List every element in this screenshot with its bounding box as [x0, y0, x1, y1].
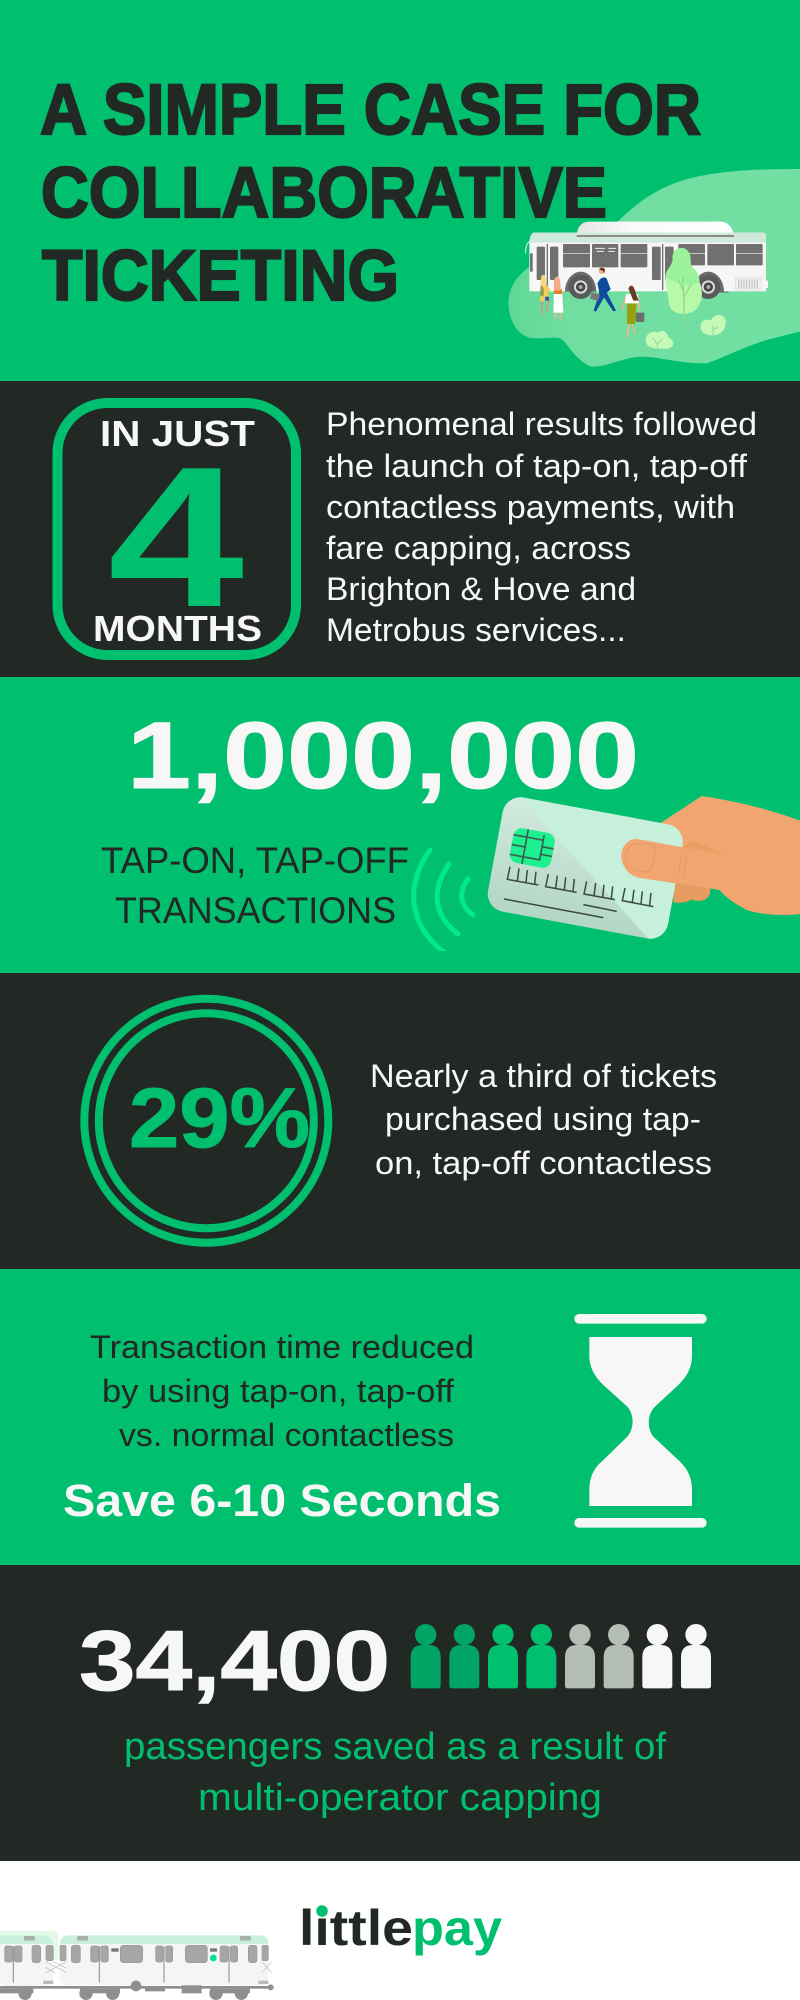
badge text: in just: IN JUST	[100, 413, 255, 454]
description text	[370, 1058, 717, 1181]
train undercarriage	[0, 1981, 274, 2000]
description text	[124, 1726, 666, 1819]
passenger in white with orange top	[553, 276, 563, 320]
title	[40, 71, 701, 316]
illustration: train	[0, 1931, 274, 2000]
bus body	[529, 233, 768, 291]
rounded badge outline	[58, 403, 296, 655]
intro paragraph	[326, 406, 757, 648]
intro paragraph: Brighton & Hove and	[326, 571, 636, 607]
logo: littlepay: little	[299, 1900, 413, 1956]
label: tap-on, tap-off transactions: TAP-ON, TAP-OFF	[101, 840, 409, 881]
card chip	[508, 827, 556, 869]
big number: 34,400	[79, 1614, 390, 1709]
title: A SIMPLE CASE FOR	[40, 71, 701, 150]
label: tap-on, tap-off transactions	[101, 840, 409, 931]
icon row: people	[411, 1624, 711, 1688]
icon: hourglass	[574, 1314, 707, 1528]
description text: vs. normal contactless	[119, 1417, 454, 1453]
credit card	[488, 797, 683, 939]
bus grille	[736, 277, 762, 290]
panel: in just 4 months	[0, 381, 800, 677]
tree	[665, 248, 702, 332]
intro paragraph: Phenomenal results followed	[326, 406, 757, 442]
thumb	[621, 839, 733, 890]
passenger in yellow	[540, 275, 551, 315]
description text: multi-operator capping	[198, 1777, 602, 1819]
bus roof	[577, 222, 734, 235]
description text: on, tap-off contactless	[375, 1145, 712, 1181]
passenger in blue suit	[590, 268, 616, 312]
logo: littlepay: pay	[412, 1900, 502, 1956]
intro paragraph: Metrobus services...	[326, 612, 626, 648]
title: TICKETING	[42, 237, 399, 316]
label: tap-on, tap-off transactions: TRANSACTIONS	[115, 890, 396, 931]
title: COLLABORATIVE	[41, 154, 607, 233]
icon: contactless waves	[414, 850, 473, 953]
train roof vents and markers	[24, 1936, 251, 1952]
description text	[90, 1329, 474, 1453]
hand back	[660, 796, 800, 915]
badge text: months: MONTHS	[93, 608, 262, 649]
description text: by using tap-on, tap-off	[102, 1373, 454, 1409]
thumbnail	[625, 843, 687, 875]
panel: transaction time	[0, 1269, 800, 1565]
train couplers	[46, 1962, 272, 1973]
card number digits	[504, 867, 653, 918]
panel: 29 percent	[0, 973, 800, 1269]
bus windows	[530, 244, 763, 290]
passenger in olive skirt	[622, 286, 644, 338]
description text: Nearly a third of tickets	[370, 1058, 717, 1094]
save seconds headline: Save 6-10 Seconds	[63, 1475, 501, 1526]
bush right	[701, 315, 726, 335]
bus wheels	[565, 272, 728, 299]
icon: hand holding card	[488, 796, 800, 939]
intro paragraph: the launch of tap-on, tap-off	[326, 448, 747, 484]
panel: title header	[0, 0, 800, 381]
intro paragraph: contactless payments, with	[326, 489, 735, 525]
description text: purchased using tap-	[385, 1101, 701, 1137]
logo: littlepay	[299, 1900, 502, 1956]
big number: 1,000,000	[127, 703, 639, 809]
train car right	[60, 1935, 268, 1985]
panel: passengers saved	[0, 1565, 800, 1861]
description text: passengers saved as a result of	[124, 1726, 666, 1768]
bush left	[646, 331, 673, 349]
train doors	[13, 1946, 229, 1983]
description text: Transaction time reduced	[90, 1329, 474, 1365]
double ring with 29%	[84, 999, 328, 1243]
intro paragraph: fare capping, across	[326, 530, 631, 566]
badge number 4: 4	[108, 426, 244, 649]
panel: footer	[0, 1861, 800, 2000]
train windows	[5, 1945, 268, 1963]
fingers behind card	[673, 880, 710, 903]
panel: one million transactions	[0, 677, 800, 973]
train car left	[0, 1931, 58, 1960]
illustration: bus with passengers	[508, 169, 800, 367]
double ring with 29%: 29%	[129, 1071, 310, 1165]
